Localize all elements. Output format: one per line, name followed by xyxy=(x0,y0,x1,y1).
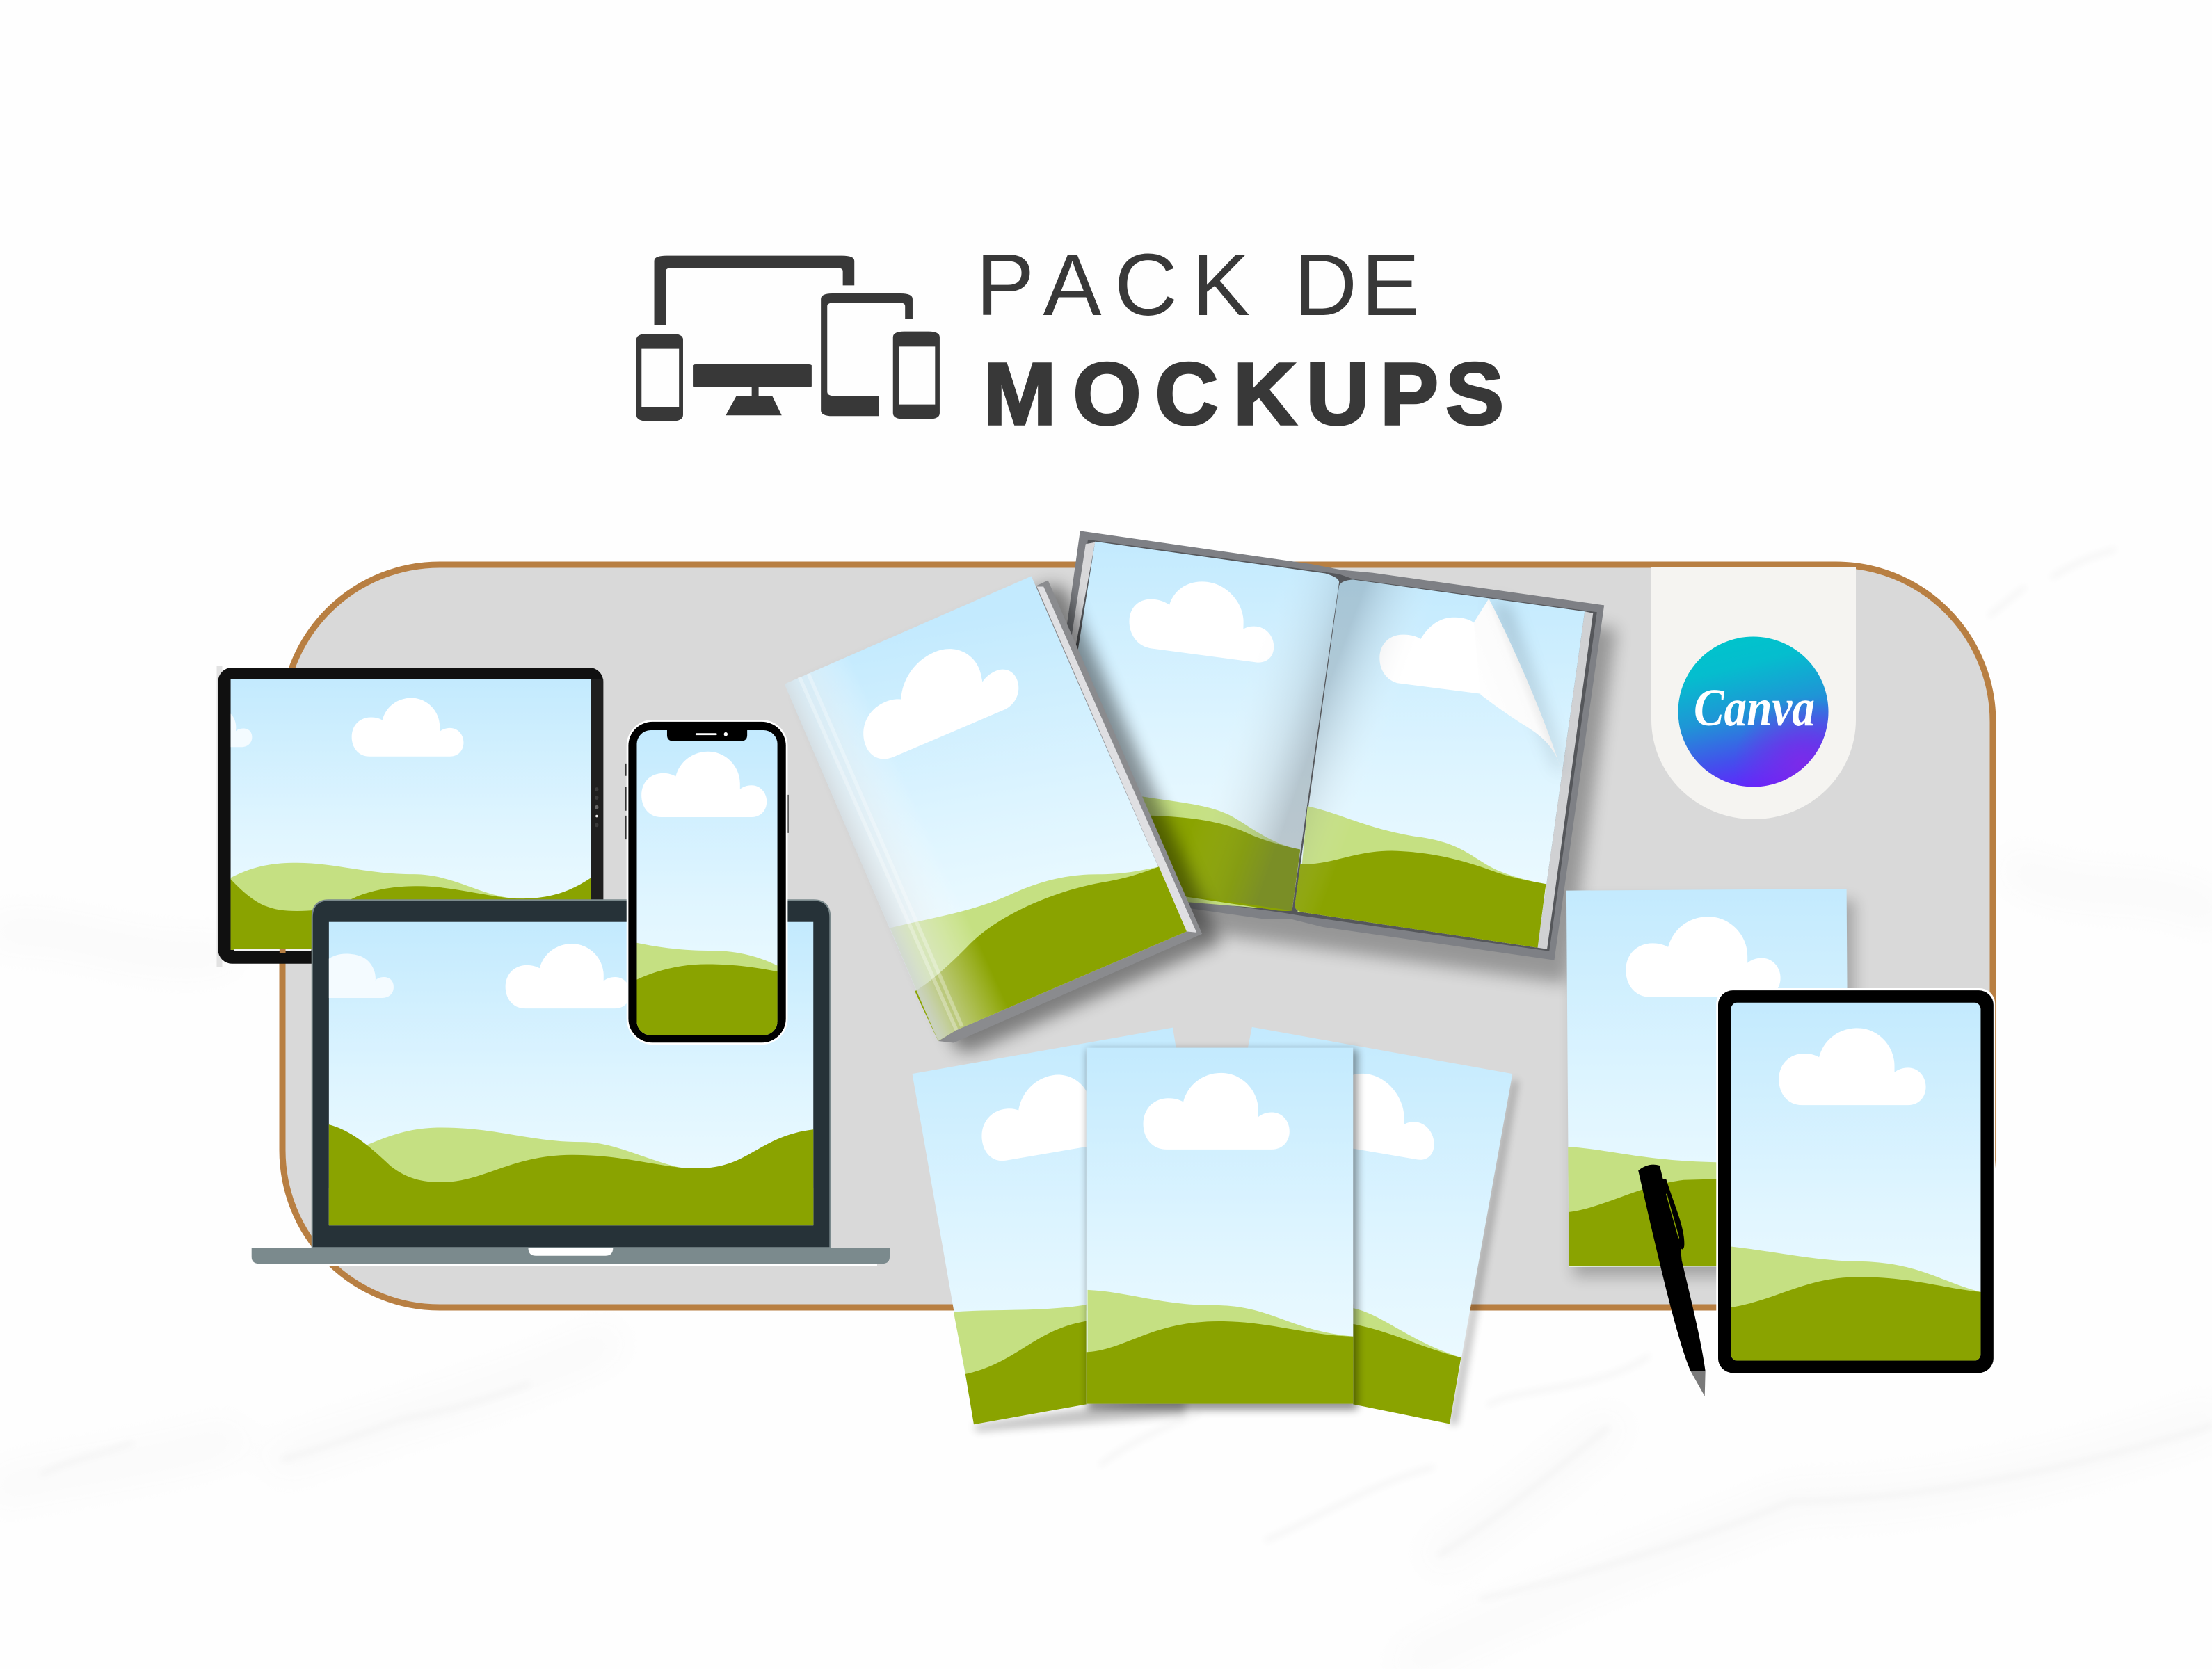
fanned posters xyxy=(913,1027,1518,1432)
page curl xyxy=(1474,599,1562,773)
device: laptop xyxy=(252,900,890,1266)
device: smartphone xyxy=(625,720,789,1045)
badge: Canva xyxy=(1651,567,1856,819)
book group: open and closed xyxy=(785,531,1617,1052)
right page xyxy=(1295,580,1585,948)
icon: pen xyxy=(1638,1165,1706,1396)
title line: MOCKUPS: MOCKUPS xyxy=(984,345,1504,443)
poster: behind tablet xyxy=(1566,889,1854,1277)
poster: center xyxy=(1087,1048,1357,1410)
poster: left xyxy=(913,1028,1185,1432)
device group: tablet, laptop, phone xyxy=(216,666,890,1266)
icon: devices logo xyxy=(636,256,940,421)
book: closed book xyxy=(785,577,1221,1052)
title xyxy=(976,236,1504,443)
tab xyxy=(1651,567,1856,819)
logo wordmark: Canva xyxy=(1694,679,1815,737)
left page xyxy=(1043,542,1339,911)
stationery group xyxy=(1566,889,1995,1396)
panel: grey rounded background xyxy=(282,565,1993,1307)
poster: right xyxy=(1248,1027,1518,1425)
book: open book xyxy=(1030,531,1617,983)
device: landscape tablet xyxy=(216,666,603,967)
logo circle xyxy=(1678,637,1828,787)
title line: PACK DE: PACK DE xyxy=(976,236,1420,334)
device: portrait tablet xyxy=(1716,988,1995,1376)
